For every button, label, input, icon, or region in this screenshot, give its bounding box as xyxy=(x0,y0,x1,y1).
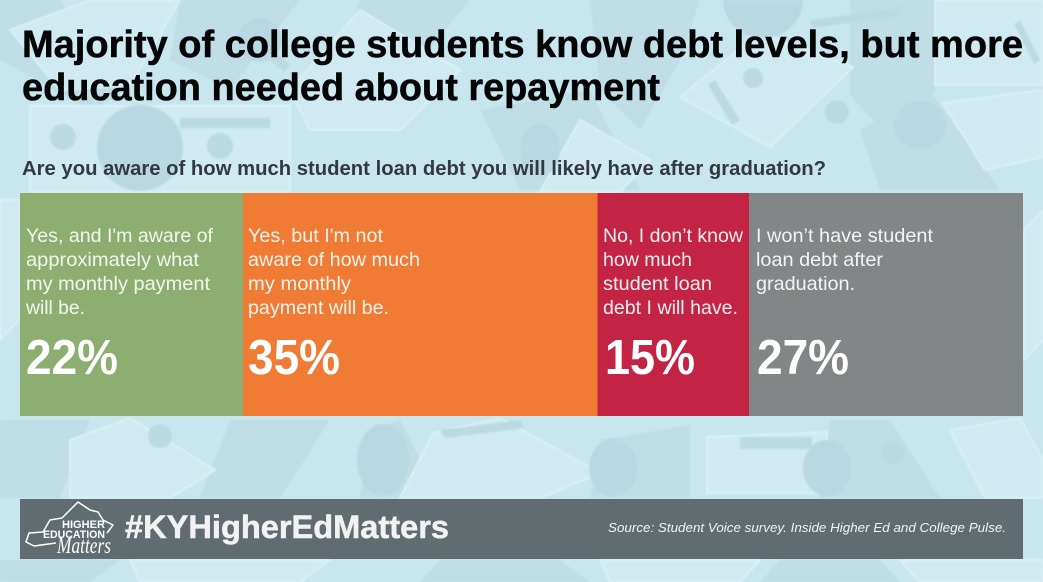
segment: unaware of debt, 15%: debt I will have. xyxy=(603,297,738,319)
segment: aware of debt and payment, 22%: will be. xyxy=(25,297,85,319)
segment: aware of debt but not payment, 35%: aware of how much xyxy=(248,249,420,271)
title: education needed about repayment xyxy=(22,67,660,109)
segment: unaware of debt, 15%: how much xyxy=(603,249,692,271)
segment: aware of debt and payment, 22% xyxy=(20,193,243,416)
title xyxy=(22,24,1023,109)
segment: aware of debt but not payment, 35%: payment will be. xyxy=(248,297,389,319)
seals and engraved text xyxy=(50,8,1040,465)
segment: aware of debt and payment, 22%: approximately what xyxy=(26,249,200,271)
segment: no student loan debt, 27%: graduation. xyxy=(756,273,855,295)
segment: aware of debt but not payment, 35%: 35% xyxy=(248,331,340,385)
stacked bar chart xyxy=(20,193,1023,416)
segment: no student loan debt, 27%: 27% xyxy=(757,331,849,385)
segment: aware of debt but not payment, 35%: Yes, but I'm not xyxy=(248,225,384,247)
segment: aware of debt but not payment, 35%: my monthly xyxy=(248,273,351,295)
icon: Kentucky logo: EDUCATION xyxy=(43,529,105,541)
segment: no student loan debt, 27% xyxy=(749,193,1023,416)
source note: Source: Student Voice survey. Inside Higher Ed and College Pulse. xyxy=(608,520,1006,535)
segment: no student loan debt, 27%: loan debt after xyxy=(756,249,884,271)
icon: Kentucky logo: Matters xyxy=(56,533,111,558)
survey question: Are you aware of how much student loan debt you will likely have after graduation? xyxy=(22,157,826,180)
footer band xyxy=(20,499,1023,559)
segment: aware of debt and payment, 22%: Yes, and I'm aware of xyxy=(26,225,214,247)
segment: aware of debt and payment, 22%: my monthly payment xyxy=(26,273,211,295)
icon: Kentucky logo: HIGHER xyxy=(62,519,105,531)
icon: Kentucky logo xyxy=(26,502,113,558)
segment: aware of debt and payment, 22%: 22% xyxy=(26,331,118,385)
segment: aware of debt but not payment, 35% xyxy=(243,193,598,416)
hashtag: #KYHigherEdMatters xyxy=(125,509,449,545)
portraits xyxy=(97,0,946,497)
segment: no student loan debt, 27%: I won’t have student xyxy=(756,225,934,247)
segment: unaware of debt, 15% xyxy=(598,193,749,416)
segment: unaware of debt, 15%: 15% xyxy=(605,331,695,385)
segment: unaware of debt, 15%: No, I don’t know xyxy=(603,225,744,247)
title: Majority of college students know debt levels, but more xyxy=(22,24,1023,66)
segment: unaware of debt, 15%: student loan xyxy=(603,273,712,295)
